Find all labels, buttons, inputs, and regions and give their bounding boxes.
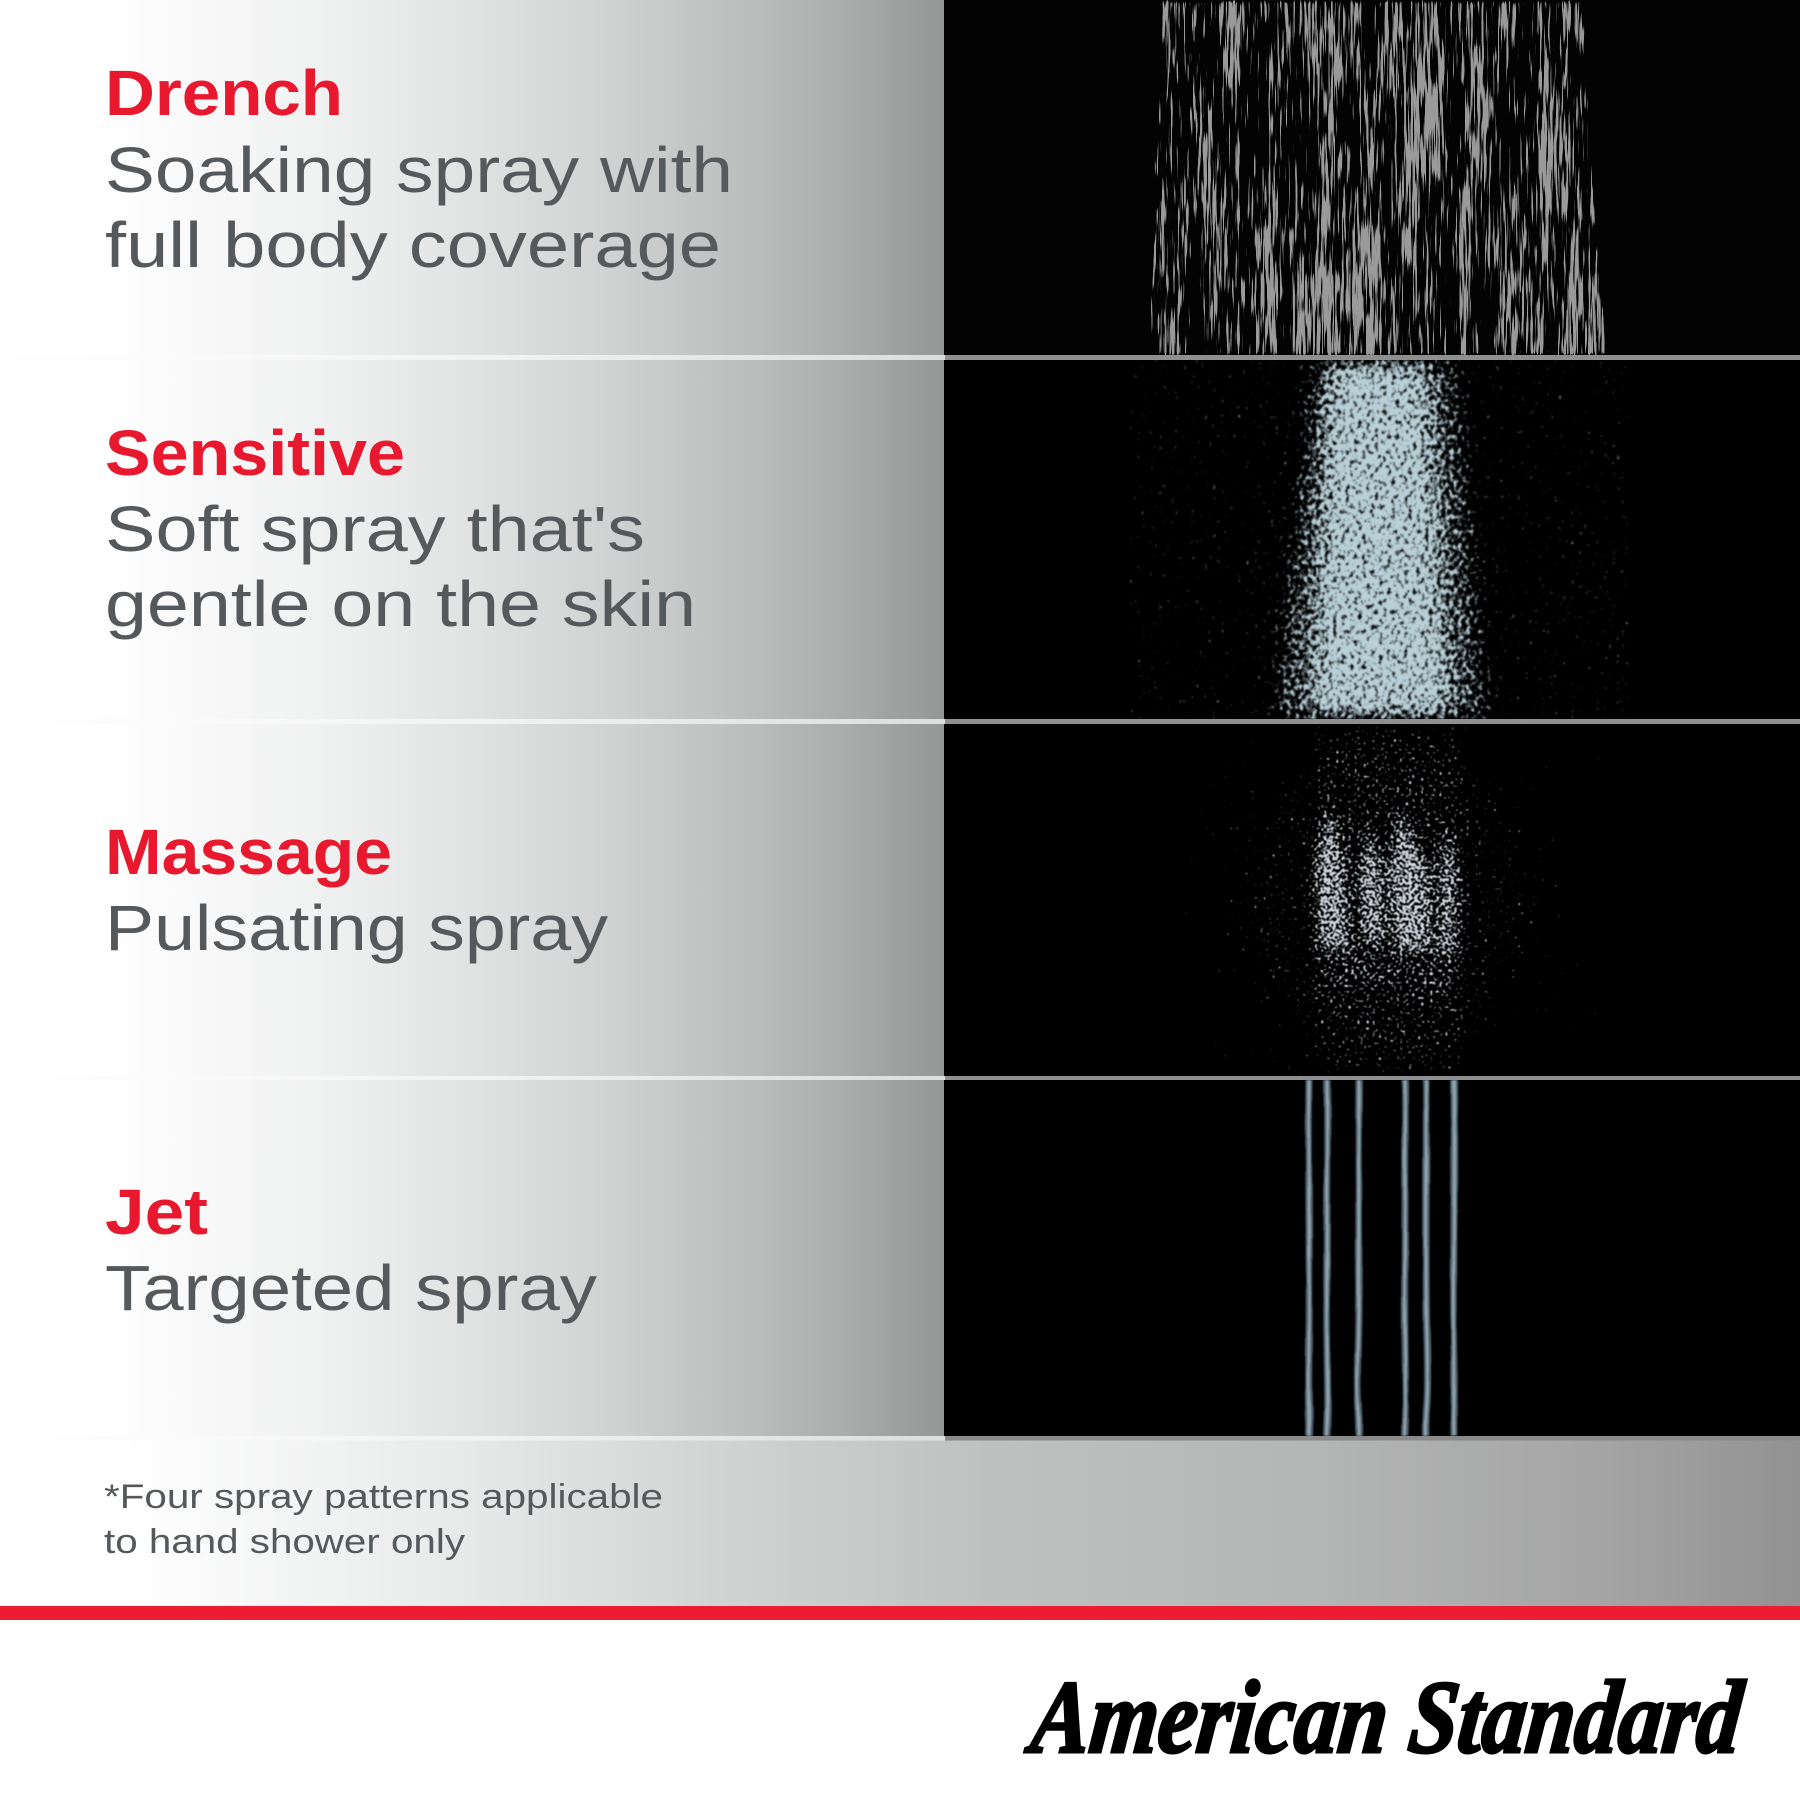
separator lines <box>0 355 1800 1440</box>
jet streams, outer <box>1309 1080 1454 1436</box>
text block: drench <box>105 57 733 281</box>
heading: drench: Drench <box>105 57 343 129</box>
spray image: jet <box>1309 1080 1454 1436</box>
spray image: massage <box>1180 724 1600 1076</box>
spray image: sensitive <box>1250 360 1520 719</box>
description: jet: Targeted spray <box>105 1252 597 1324</box>
description: drench: Soaking spray with <box>105 134 733 206</box>
background panel: upper gradient <box>0 0 945 1437</box>
description: sensitive: Soft spray that's <box>105 493 645 565</box>
description: massage: Pulsating spray <box>105 892 608 964</box>
description: sensitive: gentle on the skin <box>105 568 696 640</box>
heading: massage: Massage <box>105 816 392 888</box>
text block: massage <box>105 816 608 964</box>
background panel: footnote gradient band <box>0 1437 1800 1606</box>
panel: black spray image column <box>944 0 1800 1436</box>
text block: sensitive <box>105 417 696 640</box>
text block: jet <box>105 1176 597 1324</box>
heading: sensitive: Sensitive <box>105 417 405 489</box>
footnote: to hand shower only <box>104 1523 465 1561</box>
red divider band <box>0 1606 1800 1620</box>
description: drench: full body coverage <box>105 209 721 281</box>
footnote: *Four spray patterns applicable <box>104 1478 663 1516</box>
heading: jet: Jet <box>105 1176 208 1248</box>
spray image: drench <box>1148 0 1606 356</box>
jet streams, highlight <box>1309 1080 1454 1436</box>
